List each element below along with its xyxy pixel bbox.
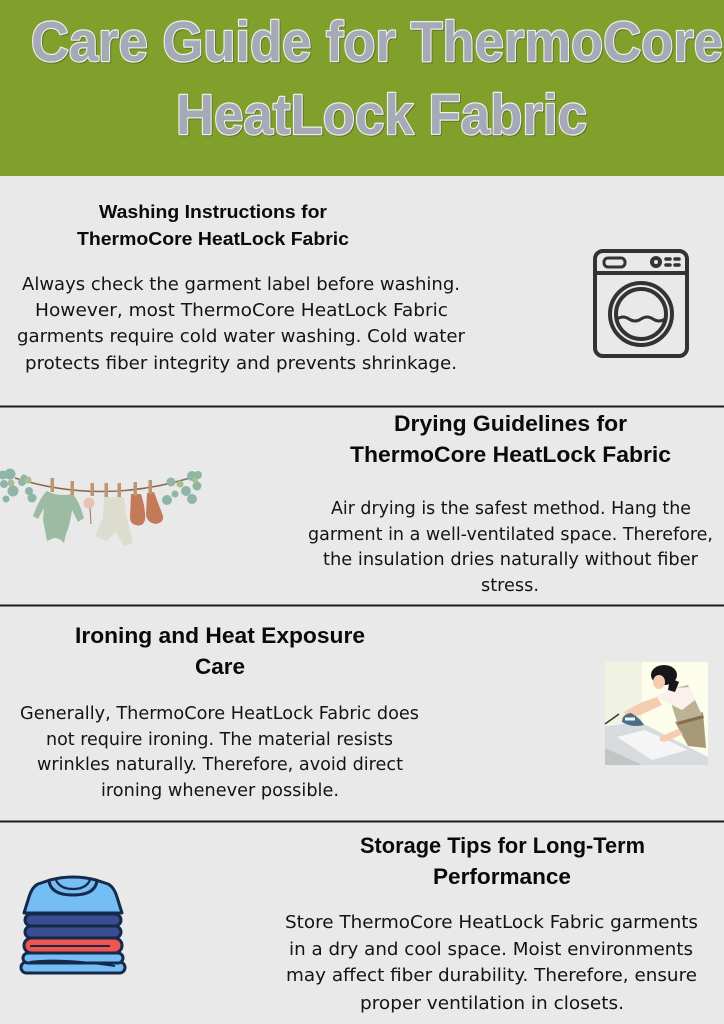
text: washing instructions: However, most ThermoCore HeatLock Fabric	[35, 300, 448, 321]
text: washing instructions: garments require cold water washing. Cold water	[17, 326, 466, 347]
heading: drying: Drying Guidelines for	[394, 411, 627, 436]
panel: washing	[17, 201, 687, 374]
pegs	[50, 478, 152, 497]
heading: ironing: Care	[195, 654, 245, 679]
panel: ironing	[20, 623, 708, 801]
bodysuit	[33, 491, 84, 543]
text: washing instructions: protects fiber integrity and prevents shrinkage.	[25, 353, 457, 374]
text: ironing care: Generally, ThermoCore HeatLock Fabric does	[20, 703, 419, 724]
heading: drying	[350, 411, 671, 467]
illustration: clothesline	[0, 468, 202, 546]
divider	[0, 406, 724, 408]
panel: drying	[0, 411, 713, 596]
text: ironing care	[20, 703, 419, 801]
text: ironing care: wrinkles naturally. Therefore, avoid direct	[37, 754, 403, 775]
text: ironing care: ironing whenever possible.	[101, 780, 339, 801]
icon: washing machine	[595, 251, 687, 356]
text: drying guidelines	[308, 498, 713, 596]
icon: folded clothes	[21, 877, 125, 973]
pants	[95, 497, 133, 546]
text: storage tips	[285, 912, 698, 1014]
title: HeatLock Fabric	[177, 84, 588, 148]
heading: washing: Washing Instructions for	[99, 201, 327, 222]
text: drying guidelines: stress.	[481, 575, 539, 596]
heading: storage: Performance	[433, 864, 571, 889]
divider	[0, 820, 724, 822]
heading: storage	[360, 833, 645, 889]
text: storage tips: in a dry and cool space. Moist environments	[289, 939, 693, 960]
text: drying guidelines: Air drying is the safest method. Hang the	[331, 498, 691, 519]
heading: drying: ThermoCore HeatLock Fabric	[350, 442, 671, 467]
heading: storage: Storage Tips for Long-Term	[360, 833, 645, 858]
illustration: woman ironing	[605, 662, 708, 765]
title: HeatLock Fabric	[176, 83, 587, 147]
text: washing instructions: Always check the garment label before washing.	[22, 274, 460, 295]
text: storage tips: proper ventilation in closets.	[360, 993, 624, 1014]
panel: storage	[21, 833, 698, 1014]
text: drying guidelines: garment in a well-ventilated space. Therefore,	[308, 524, 713, 545]
heading: washing: ThermoCore HeatLock Fabric	[77, 228, 349, 249]
heading: ironing	[75, 623, 365, 679]
title banner	[0, 0, 724, 176]
heading: ironing: Ironing and Heat Exposure	[75, 623, 365, 648]
heading: washing	[77, 201, 349, 249]
divider	[0, 604, 724, 606]
text: drying guidelines: the insulation dries naturally without fiber	[323, 549, 699, 570]
text: storage tips: Store ThermoCore HeatLock Fabric garments	[285, 912, 698, 933]
text: washing instructions	[17, 274, 466, 374]
title	[31, 10, 724, 148]
text: ironing care: not require ironing. The material resists	[46, 729, 393, 750]
shoes	[130, 494, 145, 525]
text: storage tips: may affect fiber durability. Therefore, ensure	[286, 965, 697, 986]
rattle	[84, 498, 94, 508]
